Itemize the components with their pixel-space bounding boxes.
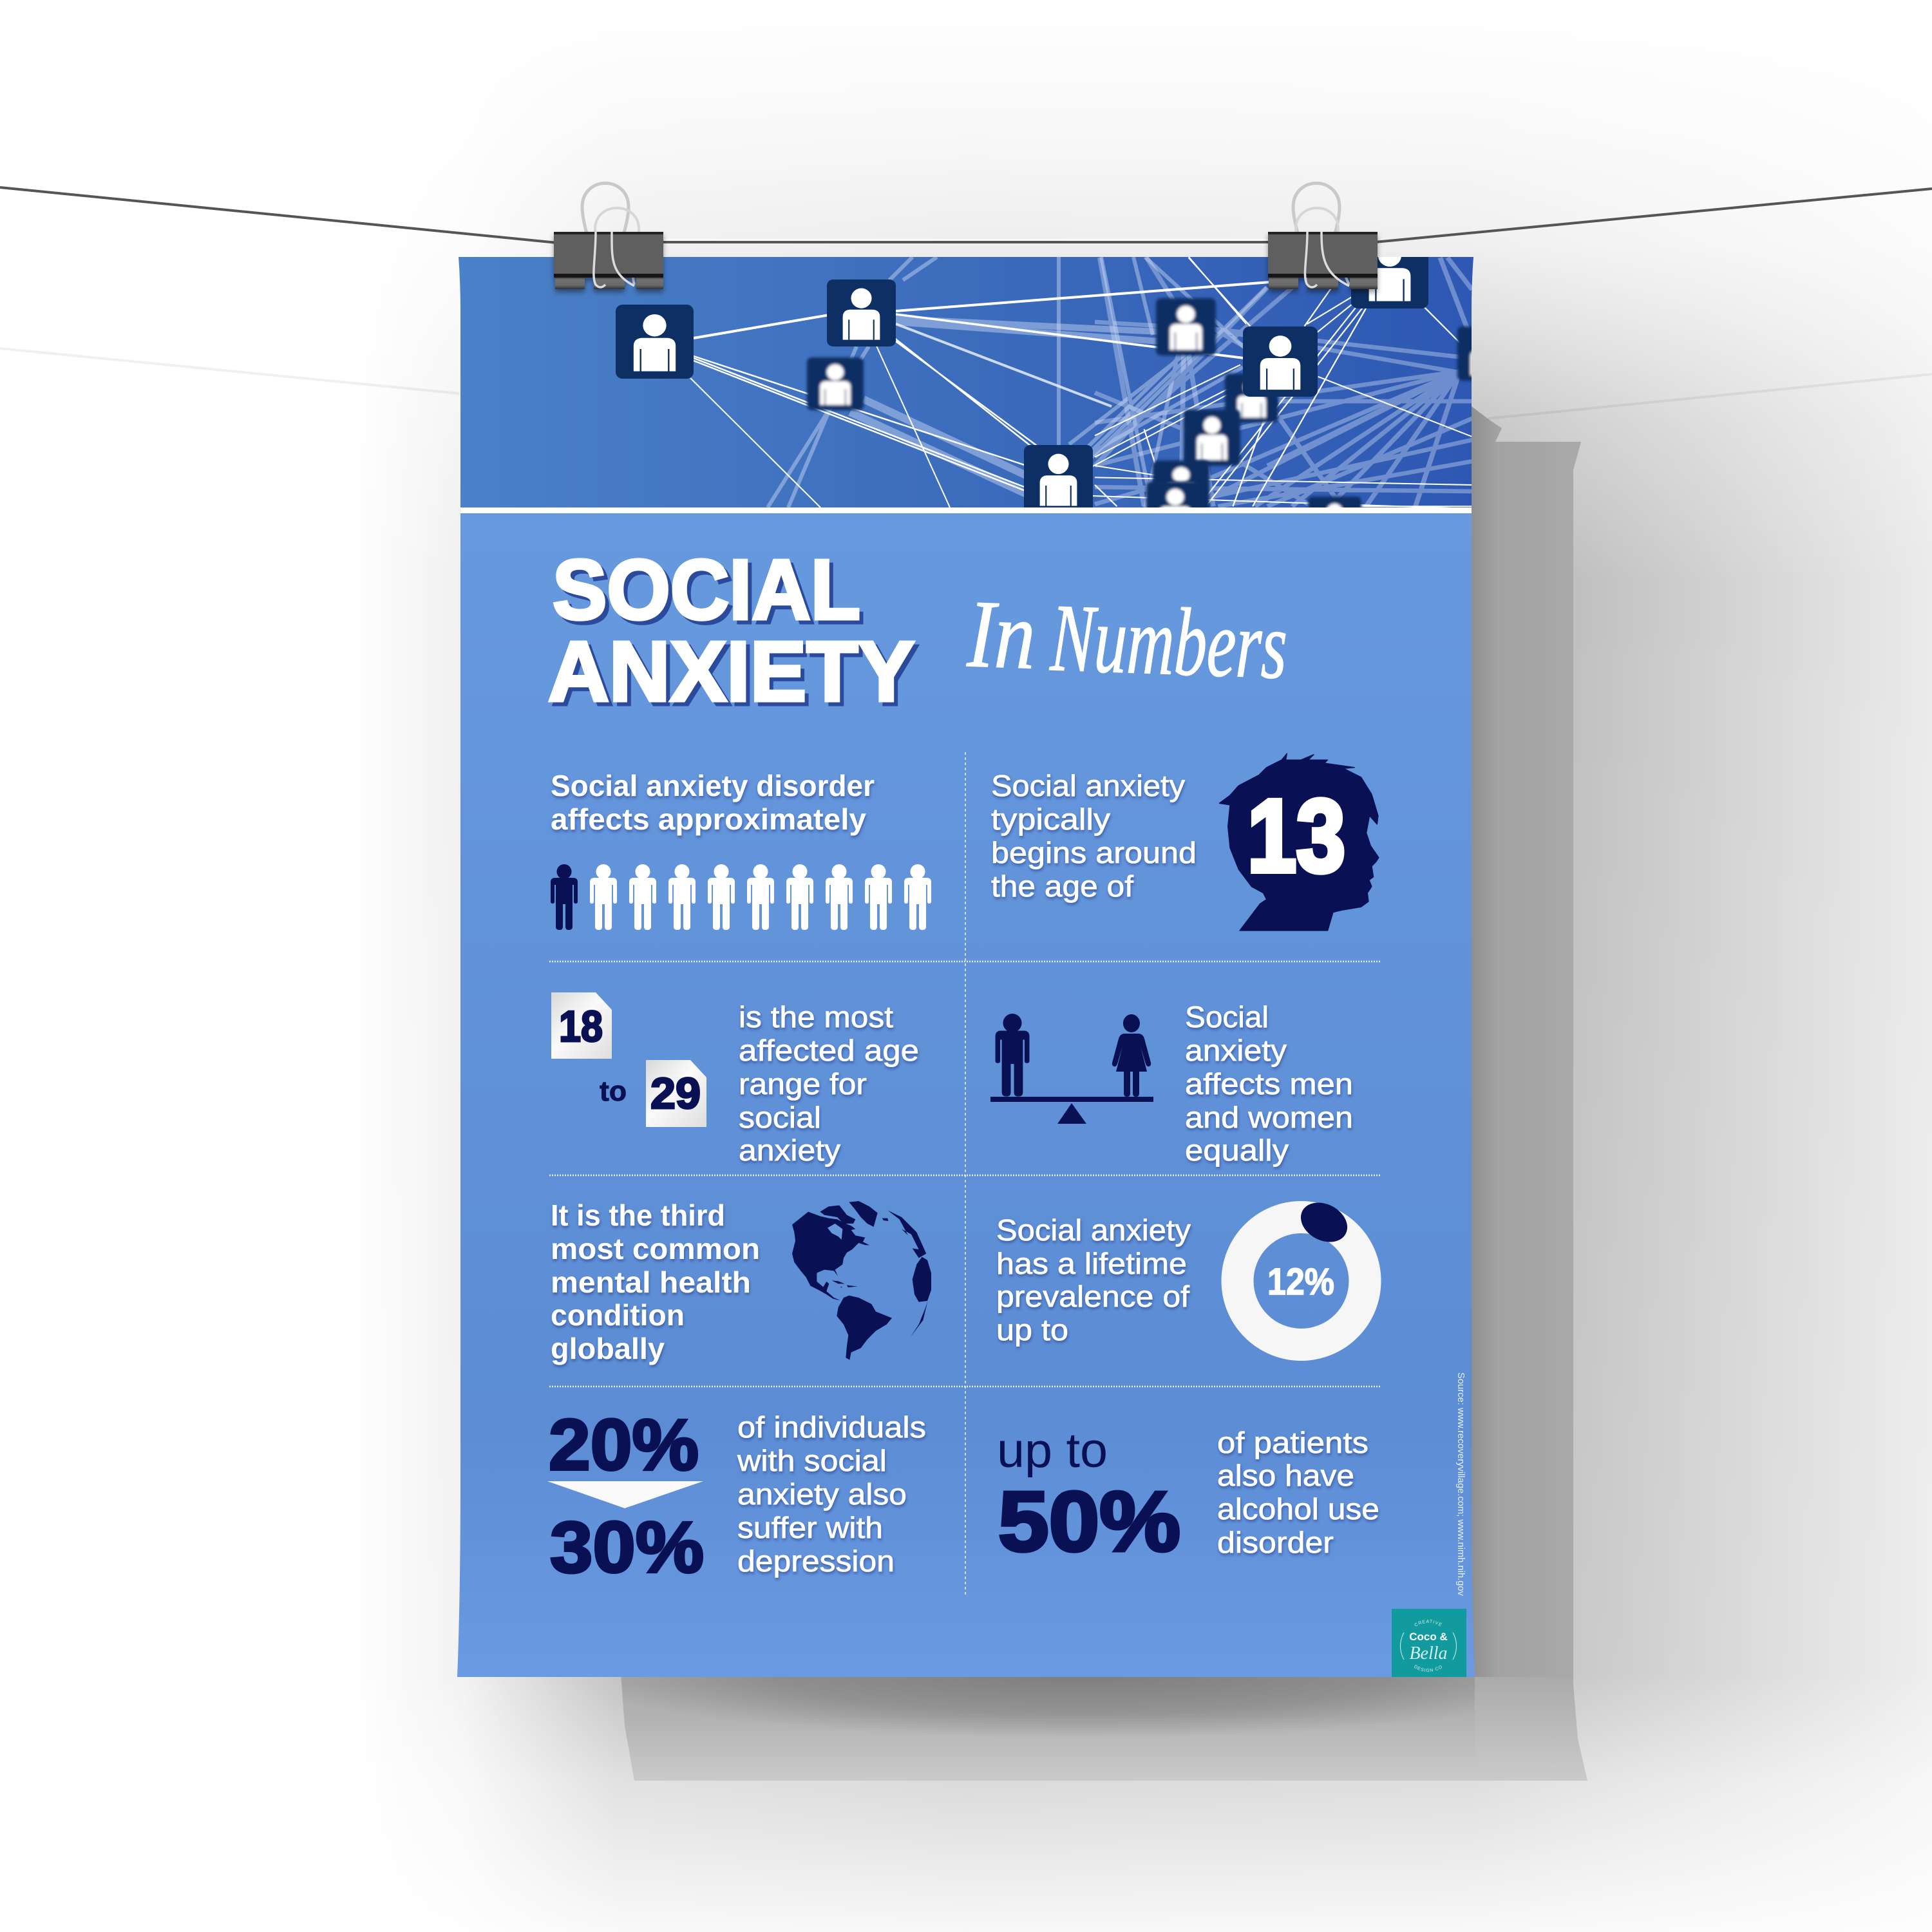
text: social anxiety disorder affects approximately: affects approximately bbox=[551, 802, 866, 836]
text: affects men and women equally bbox=[1185, 1000, 1353, 1167]
text: most affected age range: social bbox=[739, 1101, 821, 1134]
arrow: down triangle bbox=[547, 1481, 703, 1508]
text: third most common condition bbox=[551, 1198, 760, 1365]
panel: men and women equally bbox=[990, 1000, 1353, 1167]
text: lifetime prevalence of up to bbox=[996, 1213, 1191, 1347]
text: lifetime prevalence of up to: has a lifetime bbox=[996, 1247, 1187, 1280]
label: to: to bbox=[600, 1075, 627, 1107]
title: SOCIAL ANXIETY: SOCIAL bbox=[556, 546, 864, 641]
background wall shading bbox=[410, 145, 1932, 1925]
person icon E bbox=[1156, 298, 1216, 355]
logo: Coco & Bella: Bella bbox=[1409, 1643, 1448, 1663]
panel: one in ten bbox=[551, 769, 931, 930]
logo: Coco & Bella: DESIGN CO bbox=[1414, 1665, 1442, 1672]
wall shadow of poster bbox=[0, 348, 1932, 1781]
text: most affected age range: anxiety bbox=[739, 1133, 840, 1167]
text: begins around the age of: begins around bbox=[991, 836, 1197, 869]
text: affects men and women equally: anxiety bbox=[1185, 1034, 1287, 1067]
logo: Coco & Bella: Coco & bbox=[1409, 1631, 1448, 1643]
person icon G bbox=[1351, 235, 1428, 308]
label: up to: up to bbox=[997, 1423, 1108, 1478]
header network image bbox=[459, 257, 1473, 507]
text: affects men and women equally: affects men bbox=[1185, 1067, 1353, 1101]
text: patients also have alcohol use disorder: disorder bbox=[1217, 1526, 1334, 1559]
logo: Coco & Bella: CREATIVE bbox=[1414, 1620, 1443, 1627]
text: patients also have alcohol use disorder: of patients bbox=[1217, 1426, 1368, 1459]
text: patients also have alcohol use disorder: alcohol use bbox=[1217, 1492, 1379, 1526]
title: SOCIAL ANXIETY bbox=[548, 542, 918, 723]
logo: Coco & Bella bbox=[1392, 1609, 1466, 1677]
text: individuals suffer with depression bbox=[737, 1410, 926, 1578]
text: lifetime prevalence of up to: up to bbox=[996, 1313, 1068, 1347]
person icon J bbox=[1184, 410, 1240, 466]
panel: third most common bbox=[551, 1198, 931, 1365]
source note: Source: www.recoveryvillage.com; www.nimh.nih.gov bbox=[1455, 1372, 1466, 1596]
binder clip left bbox=[554, 183, 663, 289]
icon: head silhouette bbox=[1219, 753, 1379, 931]
text: individuals suffer with depression: with social bbox=[737, 1444, 887, 1477]
text: patients also have alcohol use disorder bbox=[1217, 1426, 1379, 1559]
binder clip right bbox=[1268, 183, 1378, 289]
panel: alcohol use up to 50% bbox=[997, 1423, 1379, 1569]
text: most affected age range bbox=[739, 1000, 919, 1167]
text: begins around the age of: the age of bbox=[991, 869, 1133, 903]
text: most affected age range: affected age bbox=[739, 1034, 919, 1067]
text: individuals suffer with depression: of individuals bbox=[737, 1410, 926, 1444]
subtitle: In Numbers: Numbers bbox=[1048, 584, 1289, 699]
text: third most common condition: condition bbox=[551, 1298, 685, 1332]
text: begins around the age of: typically bbox=[991, 802, 1110, 836]
stat: 50%: 50% bbox=[998, 1474, 1180, 1569]
chart: 12% donut bbox=[1238, 1195, 1365, 1345]
text: third most common condition: most common bbox=[551, 1232, 760, 1265]
panel: age of onset bbox=[991, 753, 1379, 931]
title: SOCIAL ANXIETY: ANXIETY bbox=[552, 628, 918, 723]
text: most affected age range: range for bbox=[739, 1067, 867, 1101]
person icon B bbox=[827, 279, 896, 346]
text: third most common condition: It is the third bbox=[551, 1198, 725, 1232]
person icon F bbox=[1243, 327, 1318, 397]
subtitle: In Numbers bbox=[965, 580, 1289, 699]
person icon A bbox=[616, 305, 694, 379]
text: begins around the age of bbox=[991, 769, 1197, 903]
person icon D bbox=[1024, 445, 1093, 513]
title: SOCIAL ANXIETY: SOCIAL bbox=[553, 542, 860, 637]
text: individuals suffer with depression: anxiety also bbox=[737, 1477, 907, 1511]
hanging wires bbox=[0, 187, 1932, 243]
icon row: 1 of 10 people bbox=[551, 864, 931, 930]
text: individuals suffer with depression: suffer with bbox=[737, 1511, 883, 1544]
subtitle: In Numbers: In bbox=[965, 580, 1037, 690]
icon: page 18: 18 bbox=[559, 1002, 603, 1051]
grid dividers bbox=[549, 752, 1381, 1596]
panel: lifetime prevalence bbox=[996, 1195, 1365, 1347]
panel: age range 18 to 29 bbox=[551, 992, 919, 1167]
person icon H bbox=[1457, 327, 1514, 381]
chart: 12% donut: 12% bbox=[1267, 1261, 1334, 1303]
person icon M bbox=[1308, 497, 1361, 551]
sharp network lines bbox=[690, 257, 1472, 509]
icon: globe bbox=[792, 1201, 931, 1360]
text: begins around the age of: Social anxiety bbox=[991, 769, 1185, 802]
text: social anxiety disorder affects approximately bbox=[551, 769, 875, 836]
text: most affected age range: is the most bbox=[739, 1000, 893, 1034]
person icon K bbox=[1153, 460, 1209, 512]
text: affects men and women equally: equally bbox=[1185, 1133, 1289, 1167]
text: lifetime prevalence of up to: prevalence of bbox=[996, 1280, 1189, 1313]
white divider stripe bbox=[460, 507, 1472, 513]
stat: 30%: 30% bbox=[550, 1507, 704, 1587]
icon: page 29 bbox=[646, 1060, 706, 1127]
person icon I bbox=[1225, 374, 1278, 422]
text: social anxiety disorder affects approximately: Social anxiety disorder bbox=[551, 769, 875, 802]
text: individuals suffer with depression: depression bbox=[737, 1544, 895, 1578]
text: third most common condition: globally bbox=[551, 1332, 665, 1365]
text: lifetime prevalence of up to: Social anxiety bbox=[996, 1213, 1191, 1247]
text: third most common condition: mental health bbox=[551, 1265, 751, 1299]
stat: 20%: 20% bbox=[549, 1405, 699, 1485]
panel: depression 20% to 30% bbox=[547, 1405, 926, 1587]
text: affects men and women equally: Social bbox=[1185, 1000, 1269, 1034]
text: patients also have alcohol use disorder: also have bbox=[1217, 1459, 1354, 1492]
poster body background bbox=[457, 513, 1475, 1677]
poster bbox=[457, 257, 1475, 1677]
text: affects men and women equally: and women bbox=[1185, 1101, 1353, 1134]
number 13: 13 bbox=[1247, 778, 1345, 893]
person icon C bbox=[807, 357, 864, 410]
person icon L bbox=[1144, 479, 1200, 507]
icon: page 18 bbox=[551, 992, 612, 1059]
title: SOCIAL ANXIETY: ANXIETY bbox=[548, 624, 914, 719]
icon: page 29: 29 bbox=[650, 1069, 701, 1118]
translucent network strands bbox=[1095, 258, 1472, 506]
icon: balance scale with man and woman bbox=[990, 1014, 1153, 1124]
